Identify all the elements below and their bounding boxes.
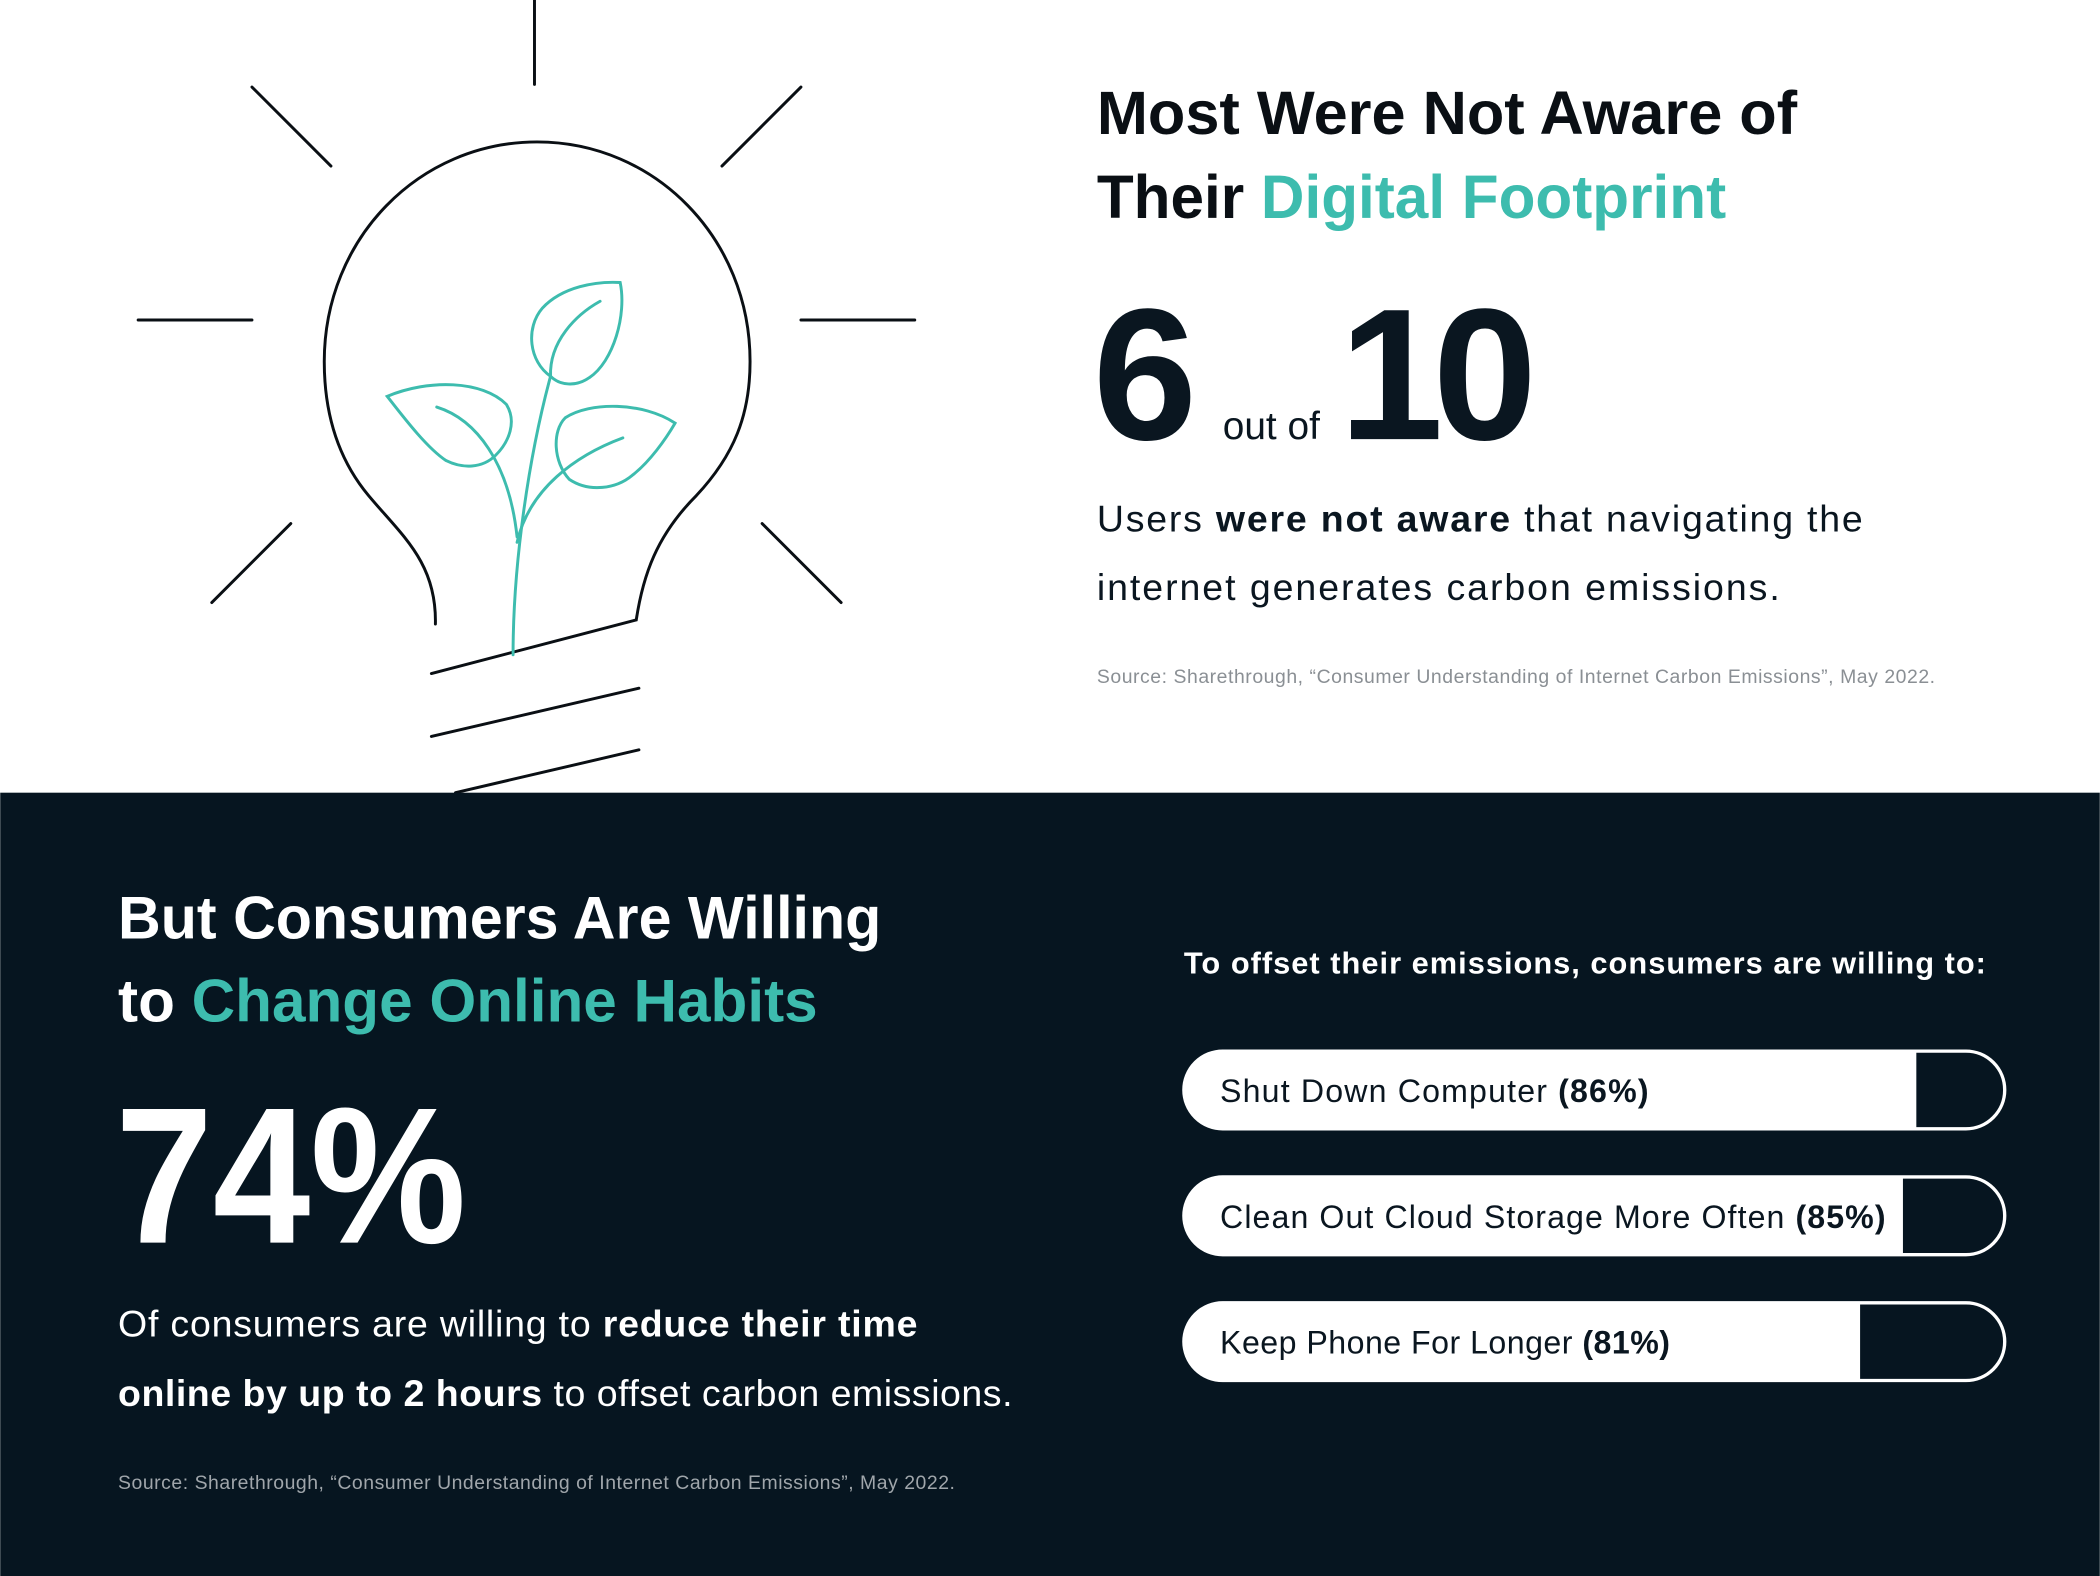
bar: shut down computer [1184, 1051, 2005, 1129]
title: consumers willing: to Change Online Habits [118, 967, 818, 1035]
bar: shut down computer: Shut Down Computer (86%) [1220, 1073, 1649, 1109]
source top: Source: Sharethrough, “Consumer Understanding of Internet Carbon Emissions”, May 2022. [1097, 666, 1935, 688]
bar: keep phone longer [1184, 1303, 2005, 1381]
title: consumers willing [118, 884, 881, 1035]
source bottom: Source: Sharethrough, “Consumer Understanding of Internet Carbon Emissions”, May 2022. [118, 1472, 955, 1494]
stat: 6 out of 10: out of [1223, 405, 1320, 448]
text: reduce time online: online by up to 2 hours to offset carbon emissions. [118, 1372, 1013, 1414]
heading: to offset: To offset their emissions, consumers are willing to: [1184, 945, 1986, 980]
panel: dark bottom [0, 793, 2100, 1576]
stat: 6 out of 10: 10 [1339, 269, 1530, 479]
title: most were not aware: Their Digital Footprint [1097, 163, 1726, 232]
title: most were not aware [1097, 79, 1798, 232]
stat: 6 out of 10 [1093, 269, 1530, 479]
icon: lightbulb with plant [138, 0, 915, 793]
text: users were not aware: internet generates carbon emissions. [1097, 566, 1780, 608]
title: most were not aware: Most Were Not Aware of [1097, 79, 1798, 148]
text: reduce time online: Of consumers are willing to reduce their time [118, 1302, 917, 1344]
text: reduce time online [118, 1302, 1013, 1414]
stat: 74%: 74% [115, 1068, 466, 1285]
text: users were not aware [1097, 498, 1863, 608]
bar: clean cloud storage: Clean Out Cloud Storage More Often (85%) [1220, 1199, 1886, 1235]
text: users were not aware: Users were not aware that navigating the [1097, 498, 1863, 540]
bar: clean cloud storage [1184, 1177, 2005, 1255]
title: consumers willing: But Consumers Are Willing [118, 884, 881, 952]
stat: 6 out of 10: 6 [1093, 269, 1192, 479]
bar: keep phone longer: Keep Phone For Longer (81%) [1220, 1325, 1670, 1361]
